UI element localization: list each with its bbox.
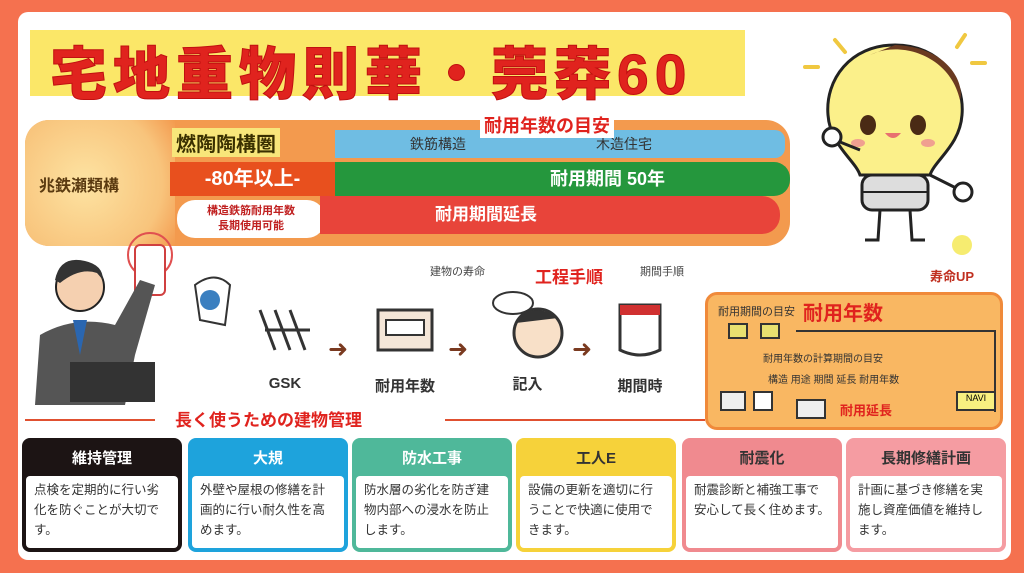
bar: red: 耐用期間延長 [435, 205, 537, 224]
label: flow heading: 工程手順 [535, 268, 603, 287]
card 4: 工人E [576, 450, 616, 467]
icon: lightbulb mascot [803, 32, 987, 255]
bar: red [320, 196, 780, 234]
label: yellow heading: 燃陶陶構圏 [176, 134, 276, 156]
text: 建物の寿命 [430, 266, 485, 278]
label: 80 years [170, 162, 335, 196]
label: white pill: 構造鉄筋耐用年数 [207, 205, 295, 217]
label: white pill [177, 200, 325, 238]
card 4: 設備の更新を適切に行うことで快適に使用できます。 [528, 483, 653, 537]
card 2 [188, 438, 348, 552]
card 5 [682, 438, 842, 552]
bar: blue: 鉄筋構造 木造住宅 [410, 136, 652, 152]
card 1: 維持管理 [72, 450, 132, 467]
title [30, 30, 745, 96]
panel: right info box: 耐用期間の目安 [718, 306, 795, 318]
section divider heading: 長く使うための建物管理 [175, 411, 362, 430]
panel: right info box: 構造 用途 期間 延長 耐用年数 [768, 375, 899, 386]
panel: right info box [705, 292, 1003, 430]
arrow: ➜ [328, 336, 348, 363]
card 1: 点検を定期的に行い劣化を防ぐことが大切です。 [34, 483, 159, 537]
card 3: 防水工事 [402, 450, 462, 467]
flow: step 3: 記入 [512, 376, 542, 393]
bar: green: 耐用期間 50年 [550, 169, 665, 189]
panel: lifespan banner [25, 120, 790, 246]
banner callout: 耐用年数の目安 [484, 116, 610, 136]
card 3: 防水層の劣化を防ぎ建物内部への浸水を防止します。 [364, 483, 489, 537]
arrow: ➜ [448, 336, 468, 363]
bar: blue [335, 130, 785, 158]
flow: step 1 [258, 310, 310, 392]
label: left: 兆鉄瀬類構 [39, 178, 119, 195]
card 6: 長期修繕計画 [881, 450, 971, 467]
icon: businessman [35, 232, 232, 405]
card 1 [22, 438, 182, 552]
card 4 [516, 438, 676, 552]
panel: right info box: 耐用年数 [803, 303, 883, 325]
card 3 [352, 438, 512, 552]
card 6 [846, 438, 1006, 552]
card 6: 計画に基づき修繕を実施し資産価値を維持します。 [858, 483, 983, 537]
bar: green [335, 162, 790, 196]
flow: step 2 [375, 308, 435, 395]
flow: step 4 [617, 304, 662, 395]
label: white pill: 長期使用可能 [218, 220, 284, 232]
title: 宅地重物則華・莞莽60 [50, 43, 692, 107]
flow: step 3 [492, 291, 564, 393]
text: 期間手順 [640, 266, 684, 278]
card 5: 耐震化 [739, 450, 784, 467]
card 2: 大規 [253, 450, 283, 467]
flow: step 2: 耐用年数 [375, 378, 435, 395]
arrow: ➜ [572, 336, 592, 363]
panel: right info box: NAVI [966, 393, 986, 403]
sunburst area [25, 120, 175, 246]
panel: right info box: 耐用年数の計算期間の目安 [763, 354, 883, 365]
flow: step 4: 期間時 [617, 378, 662, 395]
card 5: 耐震診断と補強工事で安心して長く住めます。 [694, 483, 830, 517]
label: mascot: 寿命UP [930, 269, 974, 284]
flow: step 1: GSK [269, 375, 301, 392]
panel: right info box: 耐用延長 [840, 403, 892, 418]
card 2: 外壁や屋根の修繕を計画的に行い耐久性を高めます。 [200, 483, 325, 537]
label: 80 years: -80年以上- [205, 168, 300, 190]
